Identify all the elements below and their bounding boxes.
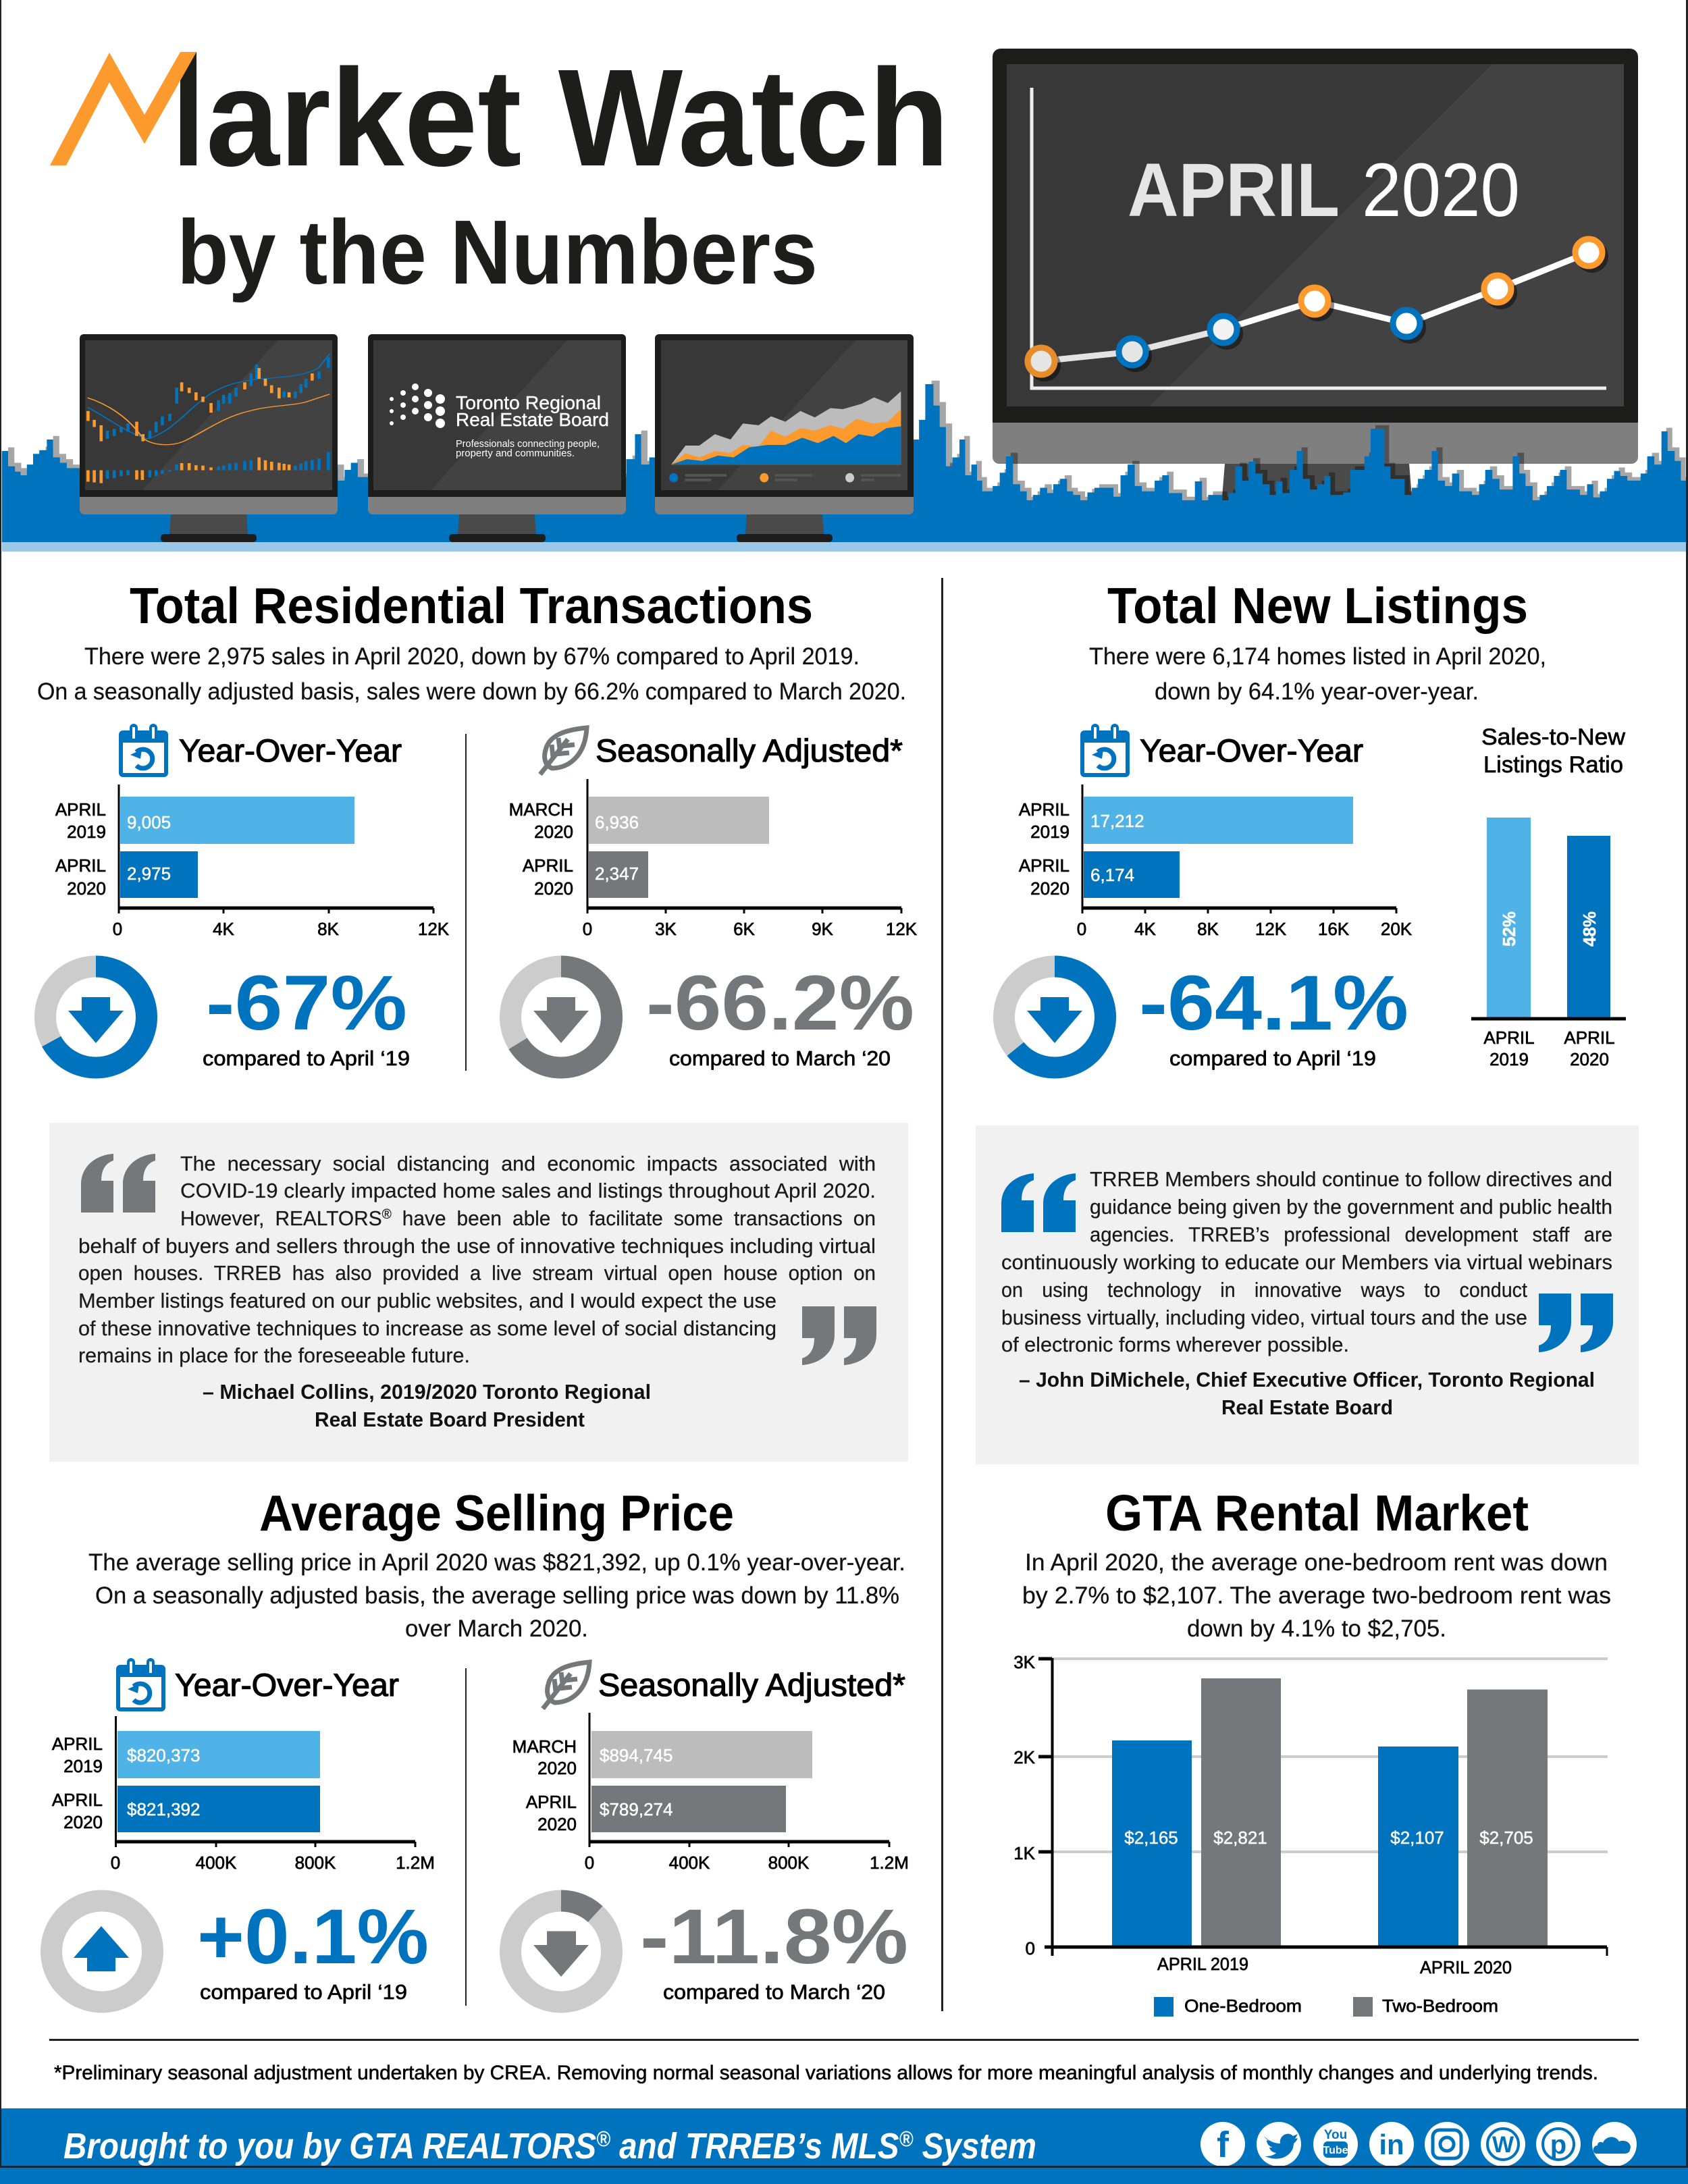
bar chart: sales-to-new listings ratio: 48% (1579, 911, 1600, 947)
icon: closing quote (1539, 1294, 1613, 1352)
stat: -64.1%: -64.1% (1139, 960, 1408, 1046)
donut: -67% (45, 967, 147, 1068)
bar chart: seasonally adjusted: 12K (886, 919, 918, 939)
bar chart: seasonally adjusted: 2020 (537, 1758, 577, 1778)
quote text: of electronic forms wherever possible. (1001, 1333, 1349, 1356)
line chart (1028, 239, 1608, 381)
quote text: TRREB Members should continue to follow directives and (1090, 1167, 1612, 1191)
bar chart: seasonally adjusted: 6K (733, 919, 756, 939)
quote text: guidance being given by the government and public health (1090, 1195, 1612, 1219)
quote text: agencies. TRREB’s professional development staff are (1090, 1223, 1612, 1246)
column divider (941, 578, 943, 2011)
heading: sales-to-new listings ratio: Sales-to-New (1481, 724, 1625, 750)
bar chart: listings: 0 (1077, 919, 1086, 939)
bar chart: seasonally adjusted: 3K (655, 919, 677, 939)
legend (1154, 1996, 1498, 2017)
icon: leaf (540, 728, 587, 774)
sub divider (465, 1668, 467, 2006)
panel: total residential transactions (37, 577, 918, 1071)
quote text (1001, 1167, 1612, 1356)
bar chart: year-over-year: 8K (317, 919, 340, 939)
bar chart: year-over-year: 2020 (67, 878, 106, 899)
bar chart: seasonally adjusted: 2,347 (595, 863, 639, 884)
quote text: The necessary social distancing and economic impacts associated with (180, 1152, 876, 1175)
monitor base (993, 419, 1638, 464)
bar chart: year-over-year: 9,005 (127, 812, 171, 832)
bar chart: year-over-year: 800K (295, 1853, 336, 1873)
bar chart: sales-to-new listings ratio: 2020 (1570, 1049, 1609, 1069)
donut: -66.2% (510, 967, 612, 1068)
intro text: In April 2020, the average one-bedroom rent was down (1025, 1549, 1608, 1576)
attribution: Real Estate Board President (315, 1408, 585, 1431)
footer text: Brought to you by GTA REALTORS (63, 2126, 668, 2166)
bar chart: rents: 2K (1013, 1747, 1036, 1767)
bar chart: year-over-year: $820,373 (127, 1745, 200, 1765)
footer text: ® (899, 2127, 914, 2151)
bar chart: seasonally adjusted: $894,745 (600, 1745, 672, 1765)
bar chart: listings: 2019 (1030, 822, 1070, 842)
heading: sales-to-new listings ratio (1481, 724, 1625, 778)
bar chart: year-over-year: $821,392 (127, 1799, 200, 1819)
heading: Total Residential Transactions (130, 577, 813, 634)
title: Market Watch: arket Watch (206, 41, 949, 195)
bar chart: listings: 16K (1318, 919, 1350, 939)
bar chart: year-over-year: 2020 (63, 1812, 103, 1832)
caption: compared to March ‘20 (663, 1980, 885, 2004)
bar chart: seasonally adjusted (509, 779, 918, 939)
bar chart: seasonally adjusted: MARCH (512, 1736, 577, 1757)
heading: year-over-year: Year-Over-Year (179, 733, 402, 768)
icon: calendar (1080, 724, 1130, 777)
bar chart: seasonally adjusted: 2020 (534, 822, 573, 842)
panel: quote, John DiMichele (976, 1125, 1639, 1464)
bar chart: rents (1013, 1652, 1608, 1977)
stat: -66.2%: -66.2% (646, 960, 914, 1046)
intro text: over March 2020. (405, 1616, 588, 1642)
bar chart: rents: 3K (1013, 1652, 1036, 1672)
bar chart: rents: $2,107 (1390, 1828, 1444, 1848)
logo dots (390, 383, 445, 428)
light blue band (2, 542, 1688, 552)
panel: average selling price (51, 1485, 909, 2006)
bar chart: year-over-year: 1.2M (396, 1853, 435, 1873)
quote text: remains in place for the foreseeable future. (78, 1343, 470, 1367)
bar chart: rents: 1K (1013, 1843, 1036, 1863)
sub divider (465, 734, 467, 1071)
panel: GTA rental market (1013, 1485, 1611, 2017)
icon: calendar (119, 724, 168, 777)
quote text: business virtually, including video, virtual tours and the use (1001, 1306, 1527, 1329)
donut: -11.8% (510, 1901, 612, 2002)
quote text: continuously working to educate our Members via virtual webinars (1001, 1250, 1612, 1274)
bar chart: seasonally adjusted: $789,274 (600, 1799, 672, 1819)
logo text: Toronto Regional (456, 392, 601, 413)
caption: compared to March ‘20 (669, 1046, 891, 1070)
bar chart: seasonally adjusted: 2020 (534, 878, 573, 899)
heading: seasonally adjusted: Seasonally Adjusted* (598, 1667, 905, 1703)
bar chart: rents: 0 (1026, 1938, 1035, 1959)
heading: GTA Rental Market (1105, 1485, 1529, 1541)
bar chart: seasonally adjusted (512, 1713, 909, 1873)
intro text: down by 64.1% year-over-year. (1155, 678, 1479, 705)
bar chart: year-over-year: APRIL (55, 799, 106, 820)
bar chart: year-over-year: APRIL (55, 855, 106, 876)
monitor 2: TRREB logo (368, 334, 626, 542)
footnote: *Preliminary seasonal adjustment undertaken by CREA. Removing normal seasonal variations allows for more meaningful analysis of monthly changes and underlying trends. (54, 2062, 1598, 2084)
donut: +0.1% (51, 1901, 153, 2002)
attribution: Real Estate Board (1221, 1395, 1393, 1419)
chart axes (1032, 88, 1606, 388)
monitor 1: candlestick chart (80, 334, 338, 542)
bar chart: year-over-year: 400K (196, 1853, 237, 1873)
caption: compared to April ‘19 (1169, 1046, 1376, 1070)
logo text (456, 392, 609, 459)
bar chart: year-over-year: APRIL (52, 1734, 103, 1754)
heading: year-over-year: Year-Over-Year (175, 1667, 399, 1703)
legend: Two-Bedroom (1382, 1996, 1498, 2016)
bar chart: year-over-year: 2019 (67, 822, 106, 842)
social icons: p (1550, 2130, 1566, 2160)
heading: seasonally adjusted: Seasonally Adjusted* (596, 733, 903, 768)
caption: compared to April ‘19 (203, 1046, 410, 1070)
attribution (203, 1380, 651, 1431)
footer text: and TRREB’s MLS (610, 2126, 899, 2166)
heading: Average Selling Price (259, 1485, 734, 1541)
quote text: open houses. TRREB has also provided a live stream virtual open house option on (78, 1261, 876, 1285)
bar chart: rents: $2,821 (1213, 1828, 1267, 1848)
bar chart: year-over-year (55, 784, 450, 939)
bar chart: year-over-year: 12K (418, 919, 450, 939)
quote text: have been able to facilitate some transactions on (392, 1206, 876, 1230)
bar chart: listings: 20K (1381, 919, 1413, 939)
icon: opening quote (81, 1154, 155, 1213)
bar chart: seasonally adjusted: 1.2M (870, 1853, 909, 1873)
bar chart: year-over-year: 2019 (63, 1756, 103, 1776)
intro text (1089, 643, 1546, 705)
quote text: Member listings featured on our public websites, and I would expect the use (78, 1289, 776, 1312)
social icons (1201, 2122, 1637, 2166)
heading: sales-to-new listings ratio: Listings Ratio (1483, 752, 1623, 778)
bar chart: year-over-year: APRIL (52, 1790, 103, 1810)
quote text (78, 1152, 876, 1367)
intro text: There were 2,975 sales in April 2020, down by 67% compared to April 2019. (84, 643, 860, 670)
bar chart: sales-to-new listings ratio (1471, 818, 1626, 1069)
attribution (1019, 1368, 1595, 1419)
bar chart: listings: 6,174 (1090, 865, 1134, 885)
icon: leaf (543, 1662, 589, 1709)
stat: -67%: -67% (206, 960, 407, 1046)
stat: +0.1%: +0.1% (197, 1894, 429, 1980)
intro text: On a seasonally adjusted basis, sales were down by 66.2% compared to March 2020. (37, 678, 906, 705)
heading: year-over-year: Year-Over-Year (1140, 733, 1363, 768)
bar chart: rents: APRIL 2019 (1157, 1954, 1248, 1974)
logo text: property and communities. (456, 448, 575, 459)
legend: One-Bedroom (1184, 1996, 1302, 2016)
bar chart: seasonally adjusted: MARCH (509, 799, 573, 820)
bar chart: year-over-year: 0 (113, 919, 122, 939)
quote text: However, REALTORS (180, 1206, 390, 1230)
footer rule (0, 2166, 1688, 2168)
bar chart: listings: APRIL (1019, 799, 1070, 820)
bar chart: listings: APRIL (1019, 855, 1070, 876)
bar chart: seasonally adjusted: 2020 (537, 1814, 577, 1834)
bar chart: year-over-year: 4K (213, 919, 235, 939)
bar chart: listings: 8K (1197, 919, 1219, 939)
intro text (1022, 1549, 1611, 1642)
attribution: – John DiMichele, Chief Executive Officer, Toronto Regional (1019, 1368, 1595, 1391)
attribution: – Michael Collins, 2019/2020 Toronto Regional (203, 1380, 651, 1404)
bar chart: sales-to-new listings ratio: APRIL (1483, 1028, 1535, 1048)
social icons: Tube (1323, 2145, 1348, 2156)
screen title: APRIL (1128, 148, 1340, 232)
bar chart: rents: APRIL 2020 (1420, 1957, 1512, 1977)
bar chart: sales-to-new listings ratio: 2019 (1489, 1049, 1529, 1069)
bar chart: year-over-year (52, 1716, 435, 1873)
bar chart: seasonally adjusted: 9K (812, 919, 834, 939)
bar chart: listings: 17,212 (1090, 811, 1144, 831)
bar chart: seasonally adjusted: 800K (768, 1853, 810, 1873)
icon: opening quote (1001, 1173, 1076, 1232)
stat: -11.8%: -11.8% (640, 1894, 908, 1980)
intro text: down by 4.1% to $2,705. (1187, 1616, 1446, 1642)
social icons: You (1324, 2128, 1347, 2142)
bar chart: year-over-year: 2,975 (127, 863, 171, 884)
footer text: ® (596, 2127, 610, 2151)
panel: quote, Michael Collins (49, 1123, 908, 1462)
bar chart: seasonally adjusted: APRIL (523, 855, 573, 876)
monitor frame (993, 49, 1638, 423)
monitor screen (1007, 64, 1624, 406)
icon: calendar (116, 1658, 165, 1711)
footer text: System (913, 2126, 1036, 2166)
header skyline: left (2, 381, 958, 542)
header skyline: right (945, 425, 1688, 542)
icon: closing quote (802, 1306, 876, 1365)
bar chart: listings: 2020 (1030, 878, 1070, 899)
bar chart: sales-to-new listings ratio: 52% (1499, 911, 1519, 947)
bar chart: seasonally adjusted: 0 (585, 1853, 594, 1873)
intro text: On a seasonally adjusted basis, the average selling price was down by 11.8% (95, 1582, 899, 1609)
quote text: of these innovative techniques to increase as some level of social distancing (78, 1316, 776, 1340)
social icons: f (1217, 2125, 1230, 2165)
footer band (0, 2108, 1688, 2184)
panel: total new listings (1004, 577, 1626, 1070)
intro text: by 2.7% to $2,107. The average two-bedroom rent was (1022, 1582, 1611, 1609)
logo text: Professionals connecting people, (456, 438, 600, 450)
quote text: behalf of buyers and sellers through the use of innovative techniques including virtual (78, 1234, 876, 1258)
bar chart: seasonally adjusted: 400K (669, 1853, 710, 1873)
bar chart: sales-to-new listings ratio: APRIL (1564, 1028, 1615, 1048)
heading: Total New Listings (1107, 577, 1528, 634)
intro text: The average selling price in April 2020 was $821,392, up 0.1% year-over-year. (88, 1549, 905, 1576)
bar chart: listings: 4K (1134, 919, 1157, 939)
monitor 3: area chart (655, 334, 914, 542)
big monitor: 2020 (1362, 148, 1520, 232)
footnote rule (49, 2039, 1639, 2041)
quote text: COVID-19 clearly impacted home sales and listings throughout April 2020. (180, 1179, 876, 1202)
monitor stand (1221, 464, 1413, 513)
donut: -64.1% (1004, 967, 1105, 1068)
bar chart: listings: 12K (1255, 919, 1287, 939)
logo text: Real Estate Board (456, 409, 609, 430)
quote text: on using technology in innovative ways to conduct (1001, 1278, 1527, 1302)
caption: compared to April ‘19 (200, 1980, 407, 2004)
subtitle: by the Numbers (177, 201, 818, 303)
intro text: There were 6,174 homes listed in April 2020, (1089, 643, 1546, 670)
bar chart: year-over-year: 0 (111, 1853, 120, 1873)
quote text: ® (382, 1207, 392, 1222)
bar chart: seasonally adjusted: APRIL (526, 1792, 577, 1812)
bar chart: seasonally adjusted: 0 (583, 919, 592, 939)
big monitor (993, 49, 1638, 513)
bar chart: rents: $2,165 (1124, 1828, 1178, 1848)
social icons: W (1492, 2132, 1514, 2158)
bar chart: rents: $2,705 (1479, 1828, 1533, 1848)
social icons: in (1379, 2129, 1404, 2160)
intro text (88, 1549, 905, 1642)
bar chart: seasonally adjusted: 6,936 (595, 812, 639, 832)
intro text (37, 643, 906, 705)
bar chart: listings (1019, 784, 1413, 939)
